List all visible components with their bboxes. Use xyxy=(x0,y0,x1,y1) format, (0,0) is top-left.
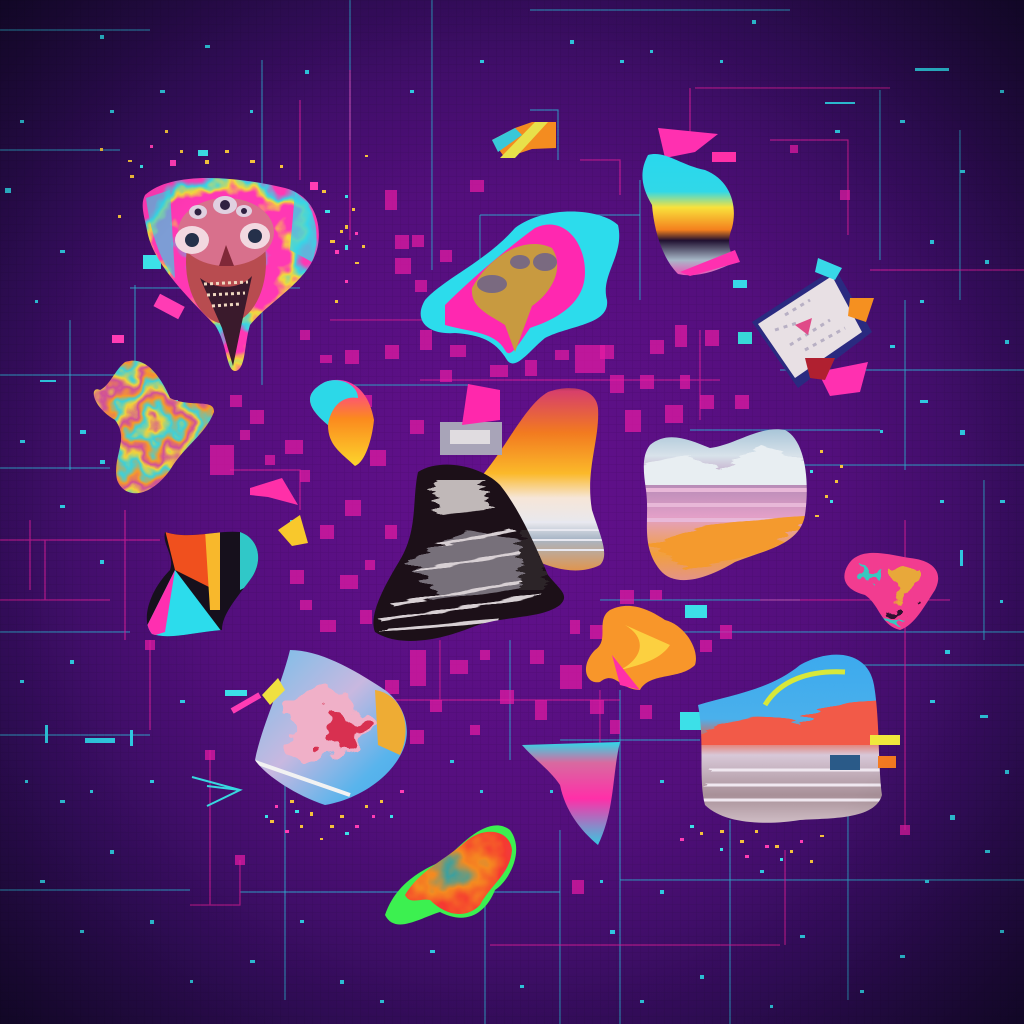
glitch debris: pink flecks xyxy=(112,145,803,858)
fragment: cyan orange blob xyxy=(310,380,374,466)
glitch debris: gold flecks xyxy=(100,130,843,863)
fragment: right pink splat xyxy=(844,552,938,630)
fragment: top right sunset bottle xyxy=(642,128,740,276)
magenta pixel field xyxy=(145,145,910,894)
fragment: left rainbow cross xyxy=(94,360,214,494)
fragment: monster face xyxy=(142,178,319,371)
glitch debris: cyan flecks xyxy=(140,150,833,861)
chevron glyph xyxy=(192,777,240,806)
fragment: white paper square xyxy=(733,258,874,396)
fragment: cyan and pink face blob xyxy=(421,212,619,363)
fragment: washed photo xyxy=(255,650,407,805)
fragment: bottom funnel xyxy=(522,742,620,845)
fragment: photo sunset xyxy=(484,388,604,570)
fragment: harbor scene xyxy=(698,654,900,823)
fragment: small pink yellow shards xyxy=(250,478,308,546)
fragment: pale glitch square and pink tab xyxy=(440,384,502,455)
fragment: bottom lava blob xyxy=(385,825,516,924)
fragment: black and white photo xyxy=(373,464,564,641)
fragment: orange flower blob xyxy=(586,606,696,690)
fragment: left split shard xyxy=(146,532,258,636)
fragment: top orange shard xyxy=(492,122,556,158)
fragment: mountain landscape xyxy=(644,429,807,580)
fragment: small yellow shard xyxy=(262,678,285,705)
